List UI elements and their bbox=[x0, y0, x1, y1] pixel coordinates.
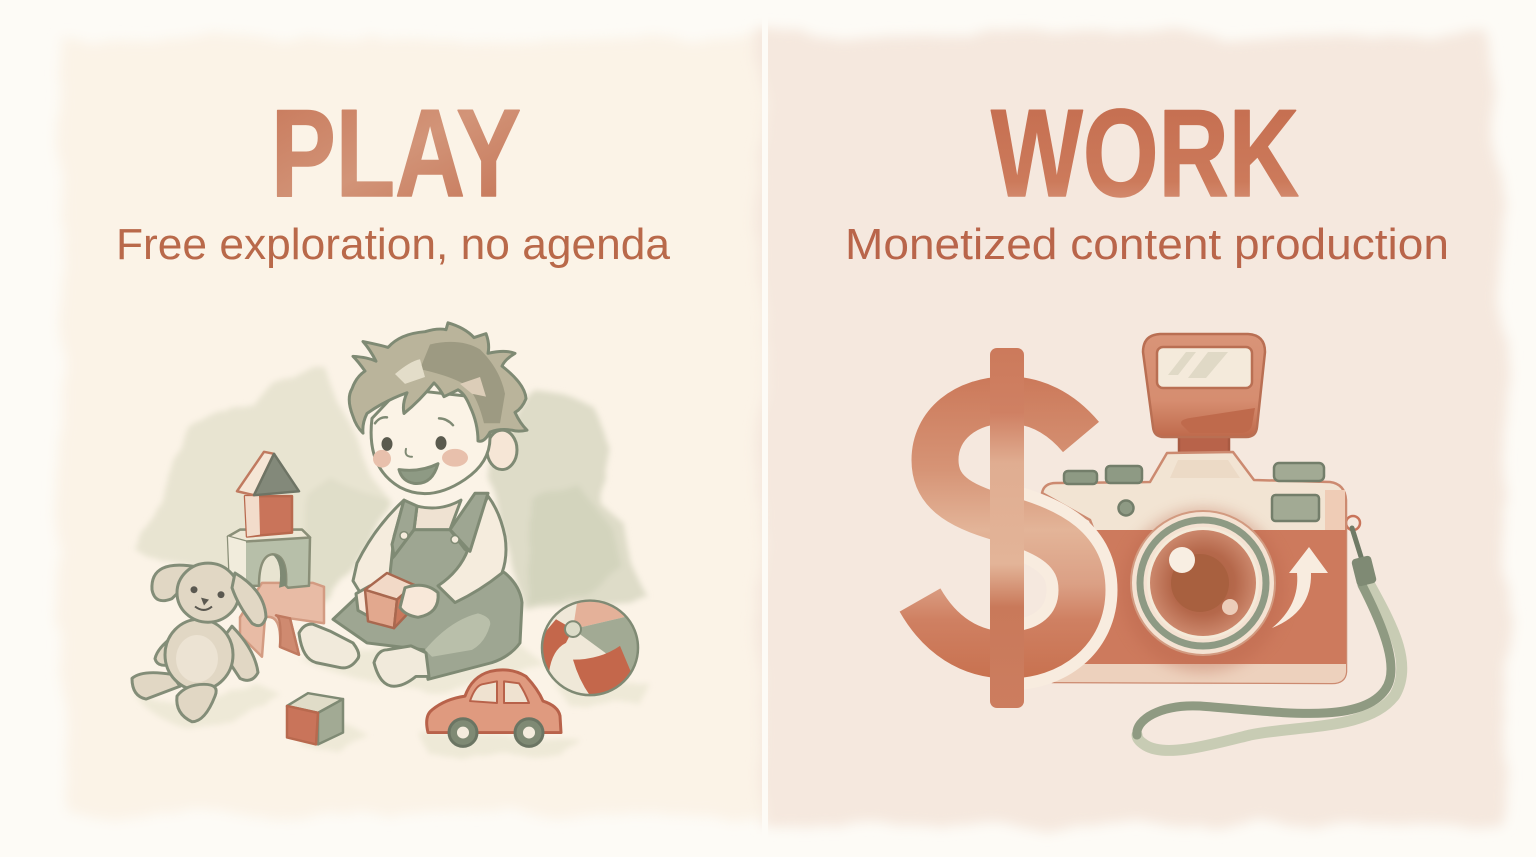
subheading: play: Free exploration, no agenda bbox=[116, 220, 671, 269]
camera lens bbox=[1121, 508, 1285, 672]
subheading: work: Monetized content production bbox=[845, 220, 1449, 269]
bunny plush bbox=[132, 563, 266, 722]
smile bbox=[399, 464, 438, 484]
ear bbox=[487, 430, 517, 470]
small cube bbox=[287, 693, 343, 744]
shirt arm left bbox=[353, 500, 404, 596]
toy car bbox=[427, 670, 561, 746]
overalls bbox=[333, 530, 522, 679]
hair bbox=[349, 323, 527, 441]
beach ball bbox=[540, 599, 640, 696]
toy block tower bbox=[228, 452, 324, 657]
illustration: child playing with toys bbox=[132, 323, 650, 755]
hands bbox=[356, 586, 376, 620]
brows bbox=[375, 417, 453, 425]
sage watercolor wash bbox=[135, 365, 650, 755]
dollar sign bbox=[920, 348, 1082, 708]
heading: PLAY: PLAY bbox=[271, 85, 521, 223]
camera flash bbox=[1143, 334, 1265, 454]
heading: WORK: WORK bbox=[991, 85, 1299, 223]
thigh highlight bbox=[425, 613, 490, 657]
illustration: dollar sign and camera bbox=[920, 334, 1402, 750]
overall straps bbox=[392, 500, 417, 556]
camera body bbox=[1042, 452, 1346, 683]
nose bbox=[406, 449, 412, 457]
shirt chest bbox=[414, 500, 461, 530]
divider between panels bbox=[762, 0, 768, 857]
shirt arm right bbox=[438, 496, 506, 603]
growth arrow bbox=[1272, 547, 1328, 628]
panel: work background bbox=[760, 34, 1506, 825]
eyes bbox=[382, 437, 392, 451]
held block bbox=[365, 573, 414, 628]
panel: play background bbox=[58, 40, 775, 815]
socks bbox=[299, 624, 359, 668]
face bbox=[371, 389, 490, 494]
camera strap bbox=[1137, 516, 1402, 750]
child bbox=[299, 323, 527, 686]
cheeks bbox=[373, 450, 391, 468]
